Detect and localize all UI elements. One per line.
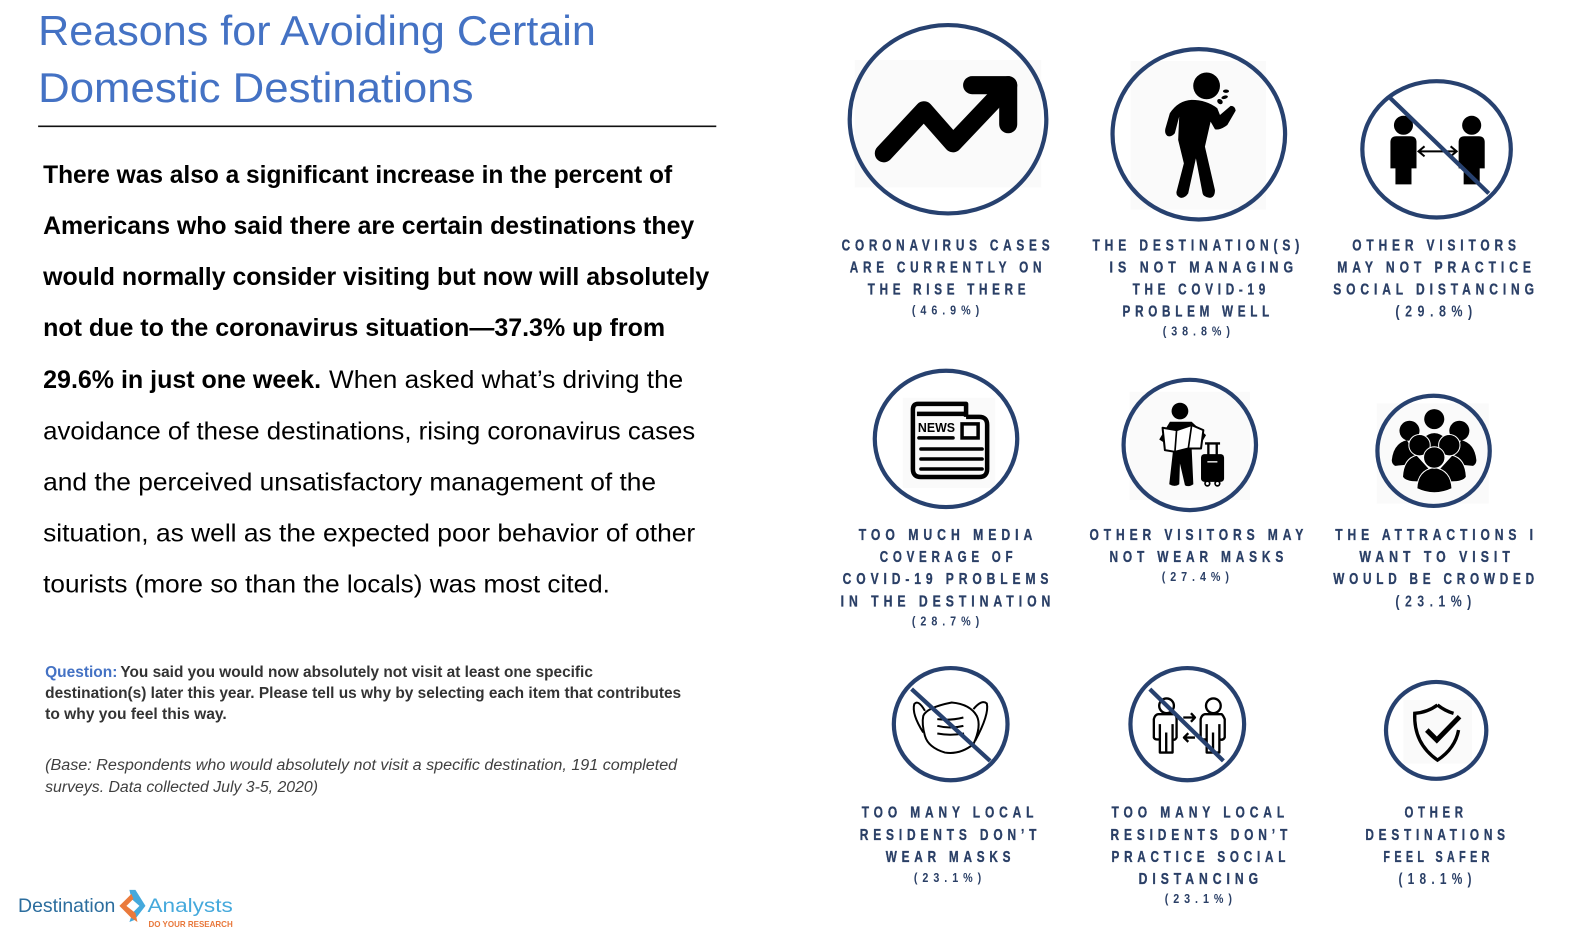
body paragraph: would normally consider visiting but now will absolutely <box>42 263 709 291</box>
logo: Destination Analysts: Destination <box>18 896 115 917</box>
caption: DESTINATIONS <box>1365 826 1510 844</box>
survey question <box>45 664 681 723</box>
body paragraph: Americans who said there are certain destinations they <box>43 212 694 240</box>
caption: (23.1%) <box>914 870 986 885</box>
logo: Destination Analysts <box>18 890 233 929</box>
caption: WANT TO VISIT <box>1359 548 1515 566</box>
caption: THE COVID-19 <box>1133 281 1270 299</box>
caption: COVID-19 PROBLEMS <box>843 570 1053 588</box>
caption: TOO MUCH MEDIA <box>859 526 1037 544</box>
item: locals don't wear masks <box>860 668 1041 885</box>
body paragraph: tourists (more so than the locals) was most cited. <box>43 570 610 598</box>
caption: (23.1%) <box>1395 592 1477 610</box>
caption: WEAR MASKS <box>886 848 1015 866</box>
title: Reasons for Avoiding Certain <box>38 7 596 54</box>
item: destination not managing problem <box>1092 49 1304 339</box>
caption: PRACTICE SOCIAL <box>1112 848 1290 866</box>
icon: no distancing <box>1362 81 1511 217</box>
survey question: to why you feel this way. <box>45 706 227 723</box>
item: visitors not social distancing <box>1333 81 1539 321</box>
body paragraph: There was also a significant increase in the percent of <box>43 161 673 189</box>
caption: (38.8%) <box>1163 324 1235 339</box>
icon: shield with check <box>1386 682 1486 779</box>
caption <box>841 526 1055 628</box>
caption: RESIDENTS DON’T <box>860 826 1041 844</box>
caption: (27.4%) <box>1162 569 1234 584</box>
survey question: You said you would now absolutely not visit at least one specific <box>120 664 593 681</box>
caption: OTHER VISITORS <box>1352 237 1521 255</box>
caption: (28.7%) <box>912 613 984 628</box>
icon: coughing person <box>1113 49 1285 219</box>
caption <box>1089 526 1308 584</box>
body paragraph: When asked what’s driving the <box>329 366 683 394</box>
title <box>38 7 596 111</box>
icon: no mask <box>894 668 1008 780</box>
icon: newspaper: NEWS <box>918 421 955 435</box>
body paragraph: situation, as well as the expected poor behavior of other <box>43 520 695 548</box>
base note: (Base: Respondents who would absolutely not visit a specific destination, 191 completed <box>45 757 679 774</box>
logo: Destination Analysts: Analysts <box>147 896 233 917</box>
caption: NOT WEAR MASKS <box>1110 548 1288 566</box>
icon: newspaper <box>875 371 1017 507</box>
caption: FEEL SAFER <box>1383 848 1494 866</box>
body paragraph: avoidance of these destinations, rising coronavirus cases <box>43 418 695 446</box>
caption: TOO MANY LOCAL <box>862 804 1038 822</box>
caption: RESIDENTS DON’T <box>1111 826 1292 844</box>
caption: (46.9%) <box>912 303 984 318</box>
caption <box>1333 526 1539 610</box>
caption: COVERAGE OF <box>880 548 1017 566</box>
caption <box>842 237 1054 318</box>
item: too much media coverage <box>841 371 1055 628</box>
item: coronavirus cases rising <box>842 25 1054 318</box>
caption: IS NOT MANAGING <box>1110 259 1298 277</box>
caption: PROBLEM WELL <box>1123 303 1274 321</box>
item: locals don't practice distancing <box>1111 668 1292 906</box>
caption: TOO MANY LOCAL <box>1112 804 1289 822</box>
caption: THE DESTINATION(S) <box>1092 237 1304 255</box>
caption: THE RISE THERE <box>868 281 1030 299</box>
caption: ARE CURRENTLY ON <box>850 259 1046 277</box>
caption: (18.1%) <box>1398 870 1477 888</box>
caption: OTHER VISITORS MAY <box>1089 526 1308 544</box>
base note: surveys. Data collected July 3-5, 2020) <box>45 779 318 796</box>
caption: (29.8%) <box>1395 303 1478 321</box>
survey question: Question: <box>45 664 117 681</box>
caption: DISTANCING <box>1139 870 1263 888</box>
caption <box>1365 804 1510 888</box>
body paragraph: not due to the coronavirus situation—37.3% up from <box>43 314 665 342</box>
title: Domestic Destinations <box>38 64 474 111</box>
icon: crowd <box>1377 396 1490 506</box>
item: visitors may not wear masks <box>1089 380 1308 584</box>
body paragraph: 29.6% in just one week. <box>43 366 321 394</box>
survey question: destination(s) later this year. Please tell us why by selecting each item that contributes <box>45 685 681 702</box>
body paragraph: and the perceived unsatisfactory management of the <box>43 469 656 497</box>
logo: Destination Analysts: DO YOUR RESEARCH <box>148 919 233 929</box>
caption <box>860 804 1041 885</box>
caption: OTHER <box>1404 804 1468 822</box>
caption <box>1111 804 1292 906</box>
caption: CORONAVIRUS CASES <box>842 237 1054 255</box>
caption <box>1333 237 1539 321</box>
icon: traveller with map and suitcase <box>1124 380 1256 510</box>
caption: (23.1%) <box>1165 891 1237 906</box>
base note <box>45 757 679 796</box>
body paragraph <box>42 161 709 598</box>
icon: rising trend arrow <box>850 25 1046 213</box>
item: attractions would be crowded <box>1333 396 1539 610</box>
item: other destinations feel safer <box>1365 682 1510 888</box>
icon: no distancing outline <box>1130 668 1244 780</box>
caption <box>1092 237 1304 339</box>
caption: IN THE DESTINATION <box>841 592 1055 610</box>
